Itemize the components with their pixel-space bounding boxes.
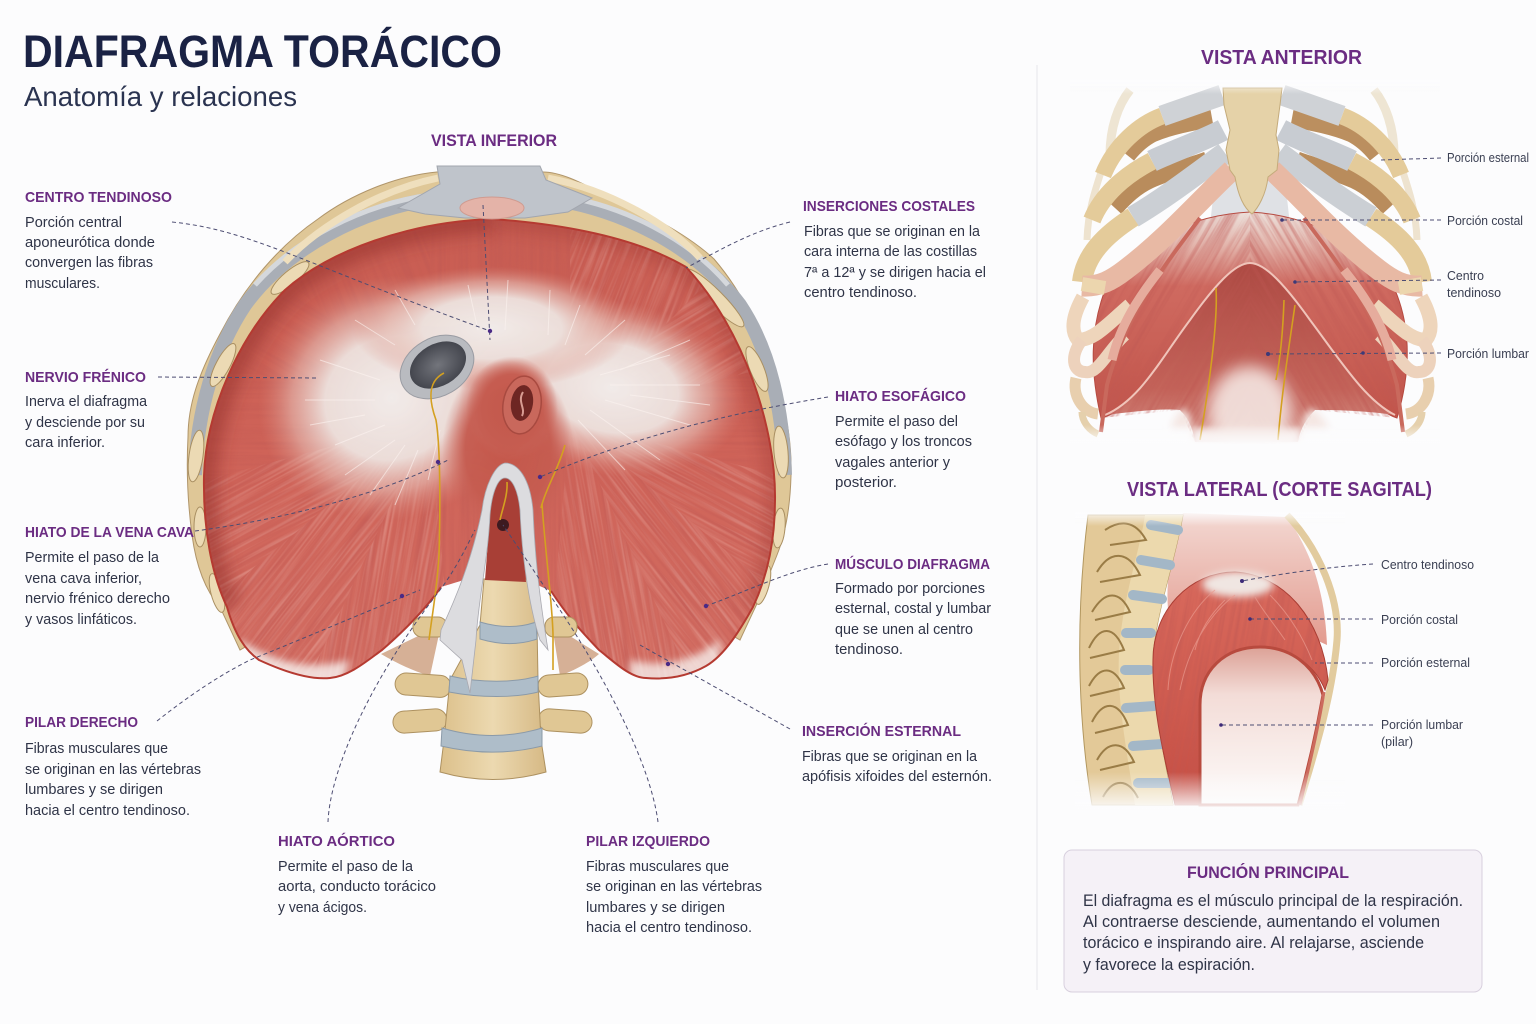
- callout: centro tendinoso: CENTRO TENDINOSO: [25, 189, 172, 206]
- callout: pilar izquierdo: PILAR IZQUIERDO: [586, 833, 710, 850]
- anterior leader lines: [1268, 158, 1441, 354]
- callout: nervio frénico: cara inferior.: [25, 435, 105, 451]
- callout: pilar derecho: Fibras musculares que: [25, 741, 168, 757]
- labels: vista anterior: Porción esternal: [1447, 151, 1529, 165]
- labels: vista anterior: Centro: [1447, 269, 1484, 283]
- heading: vista lateral: VISTA LATERAL (CORTE SAGITAL): [1127, 479, 1432, 501]
- panel text: [1083, 892, 1463, 974]
- left ribs: [1073, 90, 1232, 434]
- light fibre texture: [205, 231, 774, 670]
- illustration: anterior view: [1066, 85, 1441, 442]
- callout: músculo diafragma: que se unen al centro: [835, 622, 973, 638]
- callout: inserción esternal: INSERCIÓN ESTERNAL: [802, 722, 961, 740]
- callout: nervio frénico: Inerva el diafragma: [25, 394, 148, 410]
- lateral leader dots: [1219, 579, 1252, 727]
- rim shadow: [204, 219, 492, 607]
- anterior sternum: [1223, 88, 1282, 214]
- muscle rim: [204, 219, 775, 678]
- sternum and xiphoid: [398, 166, 592, 218]
- muscle fibre texture: [266, 506, 756, 662]
- lateral dome muscle: [1153, 572, 1328, 805]
- callout: hiato aórtico: HIATO AÓRTICO: [278, 832, 395, 850]
- lower arch interior: [1105, 263, 1395, 442]
- anterior leader dots: [1266, 218, 1365, 356]
- callout: pilar derecho: PILAR DERECHO: [25, 714, 138, 731]
- illustration: inferior view of diaphragm: [156, 166, 828, 822]
- callout: pilar izquierdo: [586, 833, 762, 936]
- callout: pilar derecho: hacia el centro tendinoso.: [25, 803, 190, 819]
- central tendon patch: [1202, 571, 1274, 597]
- callout: hiato aórtico: Permite el paso de la: [278, 859, 414, 875]
- labels: vista anterior: Porción costal: [1447, 214, 1523, 228]
- thoracic pink tissue: [1167, 513, 1327, 645]
- callout: nervio frénico: NERVIO FRÉNICO: [25, 369, 146, 386]
- labels: vista lateral: Centro tendinoso: [1381, 558, 1474, 572]
- heading: vista anterior: VISTA ANTERIOR: [1201, 47, 1363, 69]
- callout: centro tendinoso: Porción central: [25, 215, 122, 231]
- callout: hiato aórtico: aorta, conducto torácico: [278, 879, 436, 895]
- xiphoid tip: [460, 197, 524, 219]
- callout: hiato de la vena cava: y vasos linfáticos.: [25, 612, 137, 628]
- callout: nervio frénico: [25, 369, 148, 451]
- lateral leader lines: [1220, 564, 1373, 725]
- subtitle: Anatomía y relaciones: [24, 81, 297, 112]
- labels: vista lateral: Porción esternal: [1381, 656, 1470, 670]
- panel: función principal: [1064, 850, 1482, 992]
- anterior fibre texture: [1096, 212, 1390, 438]
- muscle sheet: [204, 220, 774, 678]
- central tendon: [266, 270, 737, 513]
- callout: hiato esofágico: vagales anterior y: [835, 455, 951, 471]
- bottom fade: [1070, 425, 1440, 445]
- callout: inserción esternal: apófisis xifoides del esternón.: [802, 769, 992, 785]
- callout: hiato de la vena cava: [25, 524, 194, 628]
- posterior soft tissue: [381, 625, 599, 676]
- callout: hiato esofágico: esófago y los troncos: [835, 434, 972, 450]
- callout: inserciones costales: cara interna de las costillas: [804, 244, 977, 260]
- callout: músculo diafragma: [835, 555, 991, 658]
- heading: vista inferior: VISTA INFERIOR: [431, 131, 557, 150]
- labels: vista lateral: (pilar): [1381, 735, 1413, 749]
- callout: hiato de la vena cava: vena cava inferior,: [25, 571, 142, 587]
- callout: hiato esofágico: HIATO ESOFÁGICO: [835, 388, 966, 405]
- callout: pilar izquierdo: Fibras musculares que: [586, 859, 729, 875]
- callout: músculo diafragma: Formado por porciones: [835, 581, 985, 597]
- illustration: lateral sagittal view: [1079, 513, 1373, 806]
- panel heading: FUNCIÓN PRINCIPAL: [1187, 863, 1349, 882]
- vena cava foramen: [389, 322, 485, 412]
- bottom cover: [1060, 444, 1460, 474]
- callout: hiato de la vena cava: nervio frénico derecho: [25, 591, 170, 607]
- top fade: [1070, 78, 1440, 94]
- tendon fan streaks: [305, 280, 710, 505]
- panel text: El diafragma es el músculo principal de la respiración.: [1083, 892, 1463, 910]
- labels: vista lateral: Porción lumbar: [1381, 718, 1463, 732]
- arch edge: [1105, 263, 1395, 415]
- lateral fibres: [1168, 590, 1312, 690]
- callout: nervio frénico: y desciende por su: [25, 415, 145, 431]
- lateral top fade: [1075, 510, 1345, 526]
- callout: músculo diafragma: esternal, costal y lumbar: [835, 601, 991, 617]
- callout: inserciones costales: 7ª a 12ª y se dirigen hacia el: [804, 265, 986, 281]
- panel text: Al contraerse desciende, aumentando el volumen: [1083, 913, 1440, 931]
- callout: pilar derecho: [25, 714, 201, 819]
- callout: hiato aórtico: y vena ácigos.: [278, 900, 367, 916]
- callout: centro tendinoso: [25, 189, 172, 292]
- lateral spine: [1080, 515, 1183, 805]
- anterior muscle strip: [1300, 692, 1324, 805]
- retroxiphoid pale tissue: [1210, 180, 1290, 225]
- right ribs: [1272, 90, 1431, 434]
- callout: pilar derecho: se originan en las vértebras: [25, 762, 201, 778]
- callout: inserciones costales: Fibras que se originan en la: [804, 224, 981, 240]
- callout: pilar izquierdo: hacia el centro tendinoso.: [586, 920, 752, 936]
- anterior nerves: [1200, 288, 1295, 440]
- median arcuate ligament and crura: [440, 463, 548, 693]
- callout: inserción esternal: Fibras que se originan en la: [802, 749, 978, 765]
- leader lines: [157, 205, 828, 822]
- callout: hiato de la vena cava: HIATO DE LA VENA CAVA: [25, 524, 194, 541]
- rib cage ring: [185, 172, 791, 650]
- callout: hiato esofágico: [835, 388, 972, 491]
- labels: vista anterior: [1447, 151, 1529, 361]
- abdominal cavity: [1200, 647, 1323, 805]
- callout: inserción esternal: [802, 722, 992, 785]
- callout: hiato de la vena cava: Permite el paso de la: [25, 550, 160, 566]
- esophageal hiatus: [499, 374, 545, 436]
- callout: inserciones costales: INSERCIONES COSTALES: [803, 198, 975, 215]
- callout: hiato esofágico: posterior.: [835, 475, 897, 491]
- title block: [23, 26, 502, 112]
- labels: vista lateral: Porción costal: [1381, 613, 1458, 627]
- callout: pilar izquierdo: se originan en las vértebras: [586, 879, 762, 895]
- right rim shadow: [492, 219, 775, 607]
- callout: inserciones costales: centro tendinoso.: [804, 285, 917, 301]
- labels: vista lateral: [1381, 558, 1474, 749]
- callout: músculo diafragma: tendinoso.: [835, 642, 903, 658]
- callout: pilar derecho: lumbares y se dirigen: [25, 782, 163, 798]
- labels: vista anterior: tendinoso: [1447, 286, 1501, 300]
- chest wall: [1287, 515, 1337, 805]
- callout: hiato esofágico: Permite el paso del: [835, 414, 958, 430]
- title: DIAFRAGMA TORÁCICO: [23, 26, 502, 77]
- leader dots: [400, 329, 708, 666]
- callout: centro tendinoso: convergen las fibras: [25, 255, 153, 271]
- panel text: y favorece la espiración.: [1083, 956, 1255, 974]
- lumbar spine: [392, 579, 593, 780]
- lateral fibre texture: [1154, 588, 1322, 748]
- phrenic nerves: [429, 373, 565, 670]
- callout: centro tendinoso: aponeurótica donde: [25, 235, 155, 251]
- labels: vista anterior: Porción lumbar: [1447, 347, 1529, 361]
- central pale column: [1208, 366, 1292, 458]
- callout: inserciones costales: [803, 198, 986, 301]
- diaphragm dome: [1093, 212, 1407, 418]
- lateral bottom fade: [1075, 772, 1345, 812]
- callout: pilar izquierdo: lumbares y se dirigen: [586, 900, 725, 916]
- callout: hiato aórtico: [278, 832, 436, 916]
- callout: centro tendinoso: musculares.: [25, 276, 100, 292]
- panel text: torácico e inspirando aire. Al relajarse, asciende: [1083, 934, 1424, 952]
- callout: músculo diafragma: MÚSCULO DIAFRAGMA: [835, 555, 990, 573]
